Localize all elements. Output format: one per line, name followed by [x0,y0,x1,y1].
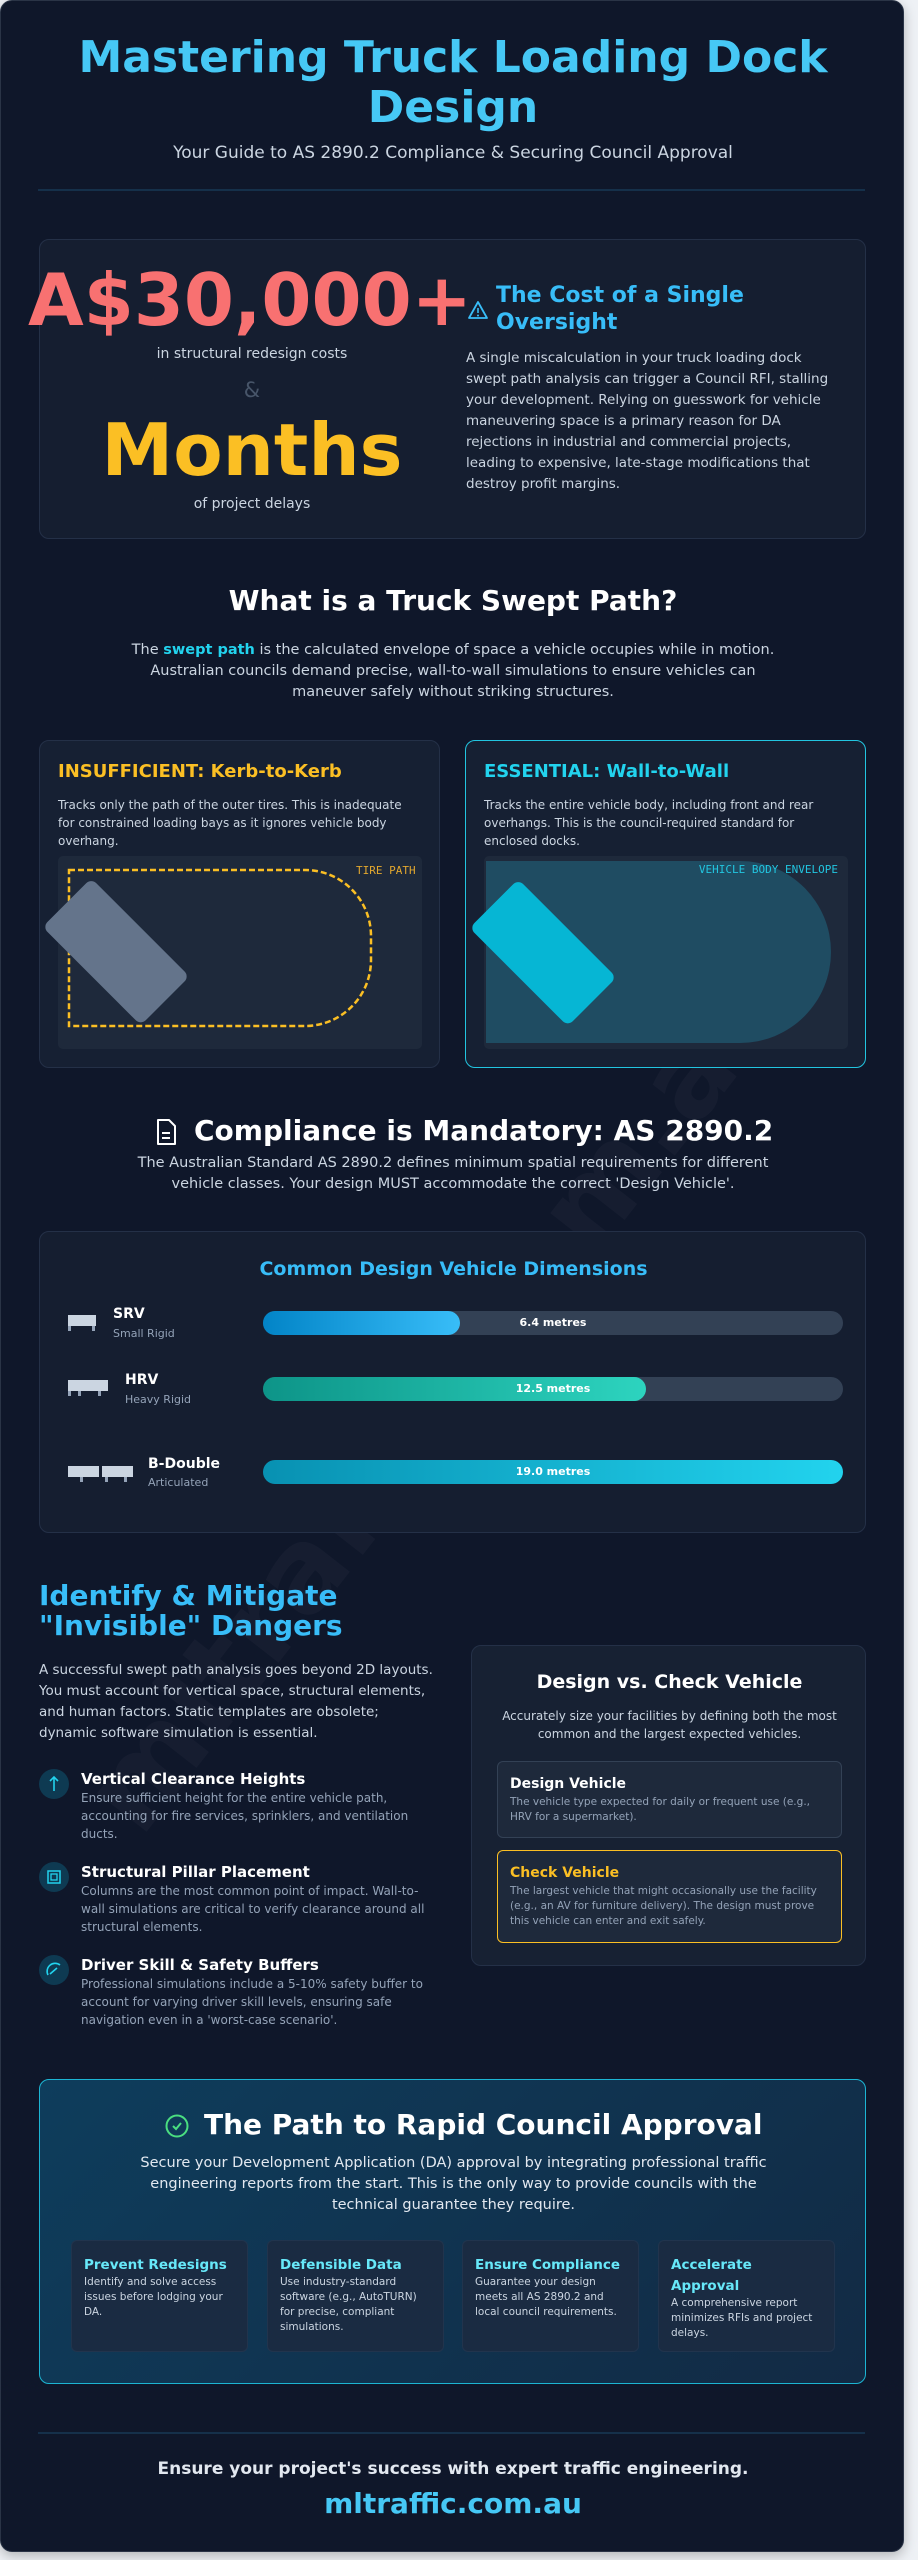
row: B-Double: Articulated [148,1476,208,1489]
title: Design [368,82,538,133]
box: check vehicle: The largest vehicle that might occasionally use the facility (e.g., an AV for furniture delivery). The design must prove this vehicle can enter and exit safely. [510,1885,817,1927]
panel: essential wall-to-wall [465,740,866,1068]
card: prevent redesigns: Prevent Redesigns [84,2257,227,2273]
heading: The Path to Rapid Council Approval [204,2108,762,2141]
row: HRV: Heavy Rigid [125,1393,191,1406]
item: pillar placement [39,1862,424,1934]
heading: compliance: Compliance is Mandatory: AS 2890.2 [194,1114,773,1147]
heading: identify dangers: Identify & Mitigate [39,1579,337,1612]
title [78,32,828,133]
description: Tracks only the path of the outer tires. This is inadequate for constrained loading bays as it ignores vehicle body overhang. [58,798,402,848]
chart title: Common Design Vehicle Dimensions [259,1258,648,1280]
row: HRV: 12.5 metres [516,1382,590,1395]
icon: gauge [39,1955,69,1985]
stat: months: Months [102,408,402,492]
subtitle: Your Guide to AS 2890.2 Compliance & Securing Council Approval [173,143,733,163]
diagram: body envelope: VEHICLE BODY ENVELOPE [699,863,838,876]
ampersand: & [244,378,260,402]
description: Accurately size your facilities by defining both the most common and the largest expected vehicles. [502,1709,837,1741]
item: pillar placement: Columns are the most common point of impact. Wall-to-wall simulations are critical to verify clearance around all structural elements. [81,1884,424,1934]
item: driver skill: Driver Skill & Safety Buffers [81,1956,319,1974]
row: B-Double [68,1456,843,1489]
card: accelerate approval: A comprehensive report minimizes RFIs and project delays. [671,2297,812,2339]
title: Mastering Truck Loading Dock [78,32,828,83]
stat label: cost: in structural redesign costs [157,346,347,362]
box: design vehicle: Design Vehicle [510,1776,626,1792]
card: defensible data: Use industry-standard software (e.g., AutoTURN) for precise, compliant simulations. [280,2276,417,2333]
icon: small truck [68,1315,96,1331]
row: SRV: Small Rigid [113,1327,175,1340]
diagram: body envelope [484,856,848,1049]
heading: identify dangers: "Invisible" Dangers [39,1609,343,1642]
card: prevent redesigns: Identify and solve access issues before lodging your DA. [84,2276,223,2318]
row: SRV: SRV [113,1306,145,1322]
icon: up arrow [39,1769,69,1799]
card: defensible data [267,2240,444,2352]
card: accelerate approval [658,2240,835,2352]
icon: check circle [166,2114,188,2138]
box: check vehicle: Check Vehicle [510,1865,619,1881]
footer tagline: Ensure your project's success with expert traffic engineering. [158,2459,748,2479]
heading: cost of single oversight: The Cost of a Single [496,283,744,308]
icon: articulated truck [68,1466,133,1482]
card: accelerate approval: Accelerate Approval [671,2257,752,2294]
heading: ESSENTIAL: Wall-to-Wall [484,761,729,782]
heading: cost of single oversight [496,283,744,335]
row: SRV [68,1306,843,1340]
card: ensure compliance: Ensure Compliance [475,2257,620,2273]
panel: path to rapid council approval [39,2079,866,2384]
item: driver skill: Professional simulations include a 5-10% safety buffer to account for varying driver skill levels, ensuring safe navigation even in a 'worst-case scenario'. [81,1977,423,2027]
panel: bar chart vehicle dimensions [39,1231,866,1533]
paragraph: A single miscalculation in your truck loading dock swept path analysis can trigger a Council RFI, stalling your development. Relying on guesswork for vehicle maneuvering space is a primary reason for DA rejections in industrial and commercial projects, leading to expensive, late-stage modifications that destroy profit margins. [466,350,828,492]
box: design vehicle: The vehicle type expected for daily or frequent use (e.g., HRV for a supermarket). [510,1796,810,1823]
item: vertical clearance: Ensure sufficient height for the entire vehicle path, accounting for fire services, sprinklers, and ventilation ducts. [81,1791,408,1841]
item: vertical clearance: Vertical Clearance Heights [81,1770,305,1788]
stat: cost: A$30,000+ [28,258,472,342]
icon: warning [468,301,488,319]
watermark: mltraffic.com.au [57,940,815,1856]
card: defensible data: Defensible Data [280,2257,402,2273]
row: B-Double: 19.0 metres [516,1465,590,1478]
panel: insufficient kerb-to-kerb [39,740,440,1068]
row: SRV: 6.4 metres [520,1316,586,1329]
row: HRV: HRV [125,1372,158,1388]
paragraph: Secure your Development Application (DA) approval by integrating professional traffic engineering reports from the start. This is the only way to provide councils with the technical guarantee they require. [140,2155,767,2213]
paragraph: compliance: The Australian Standard AS 2890.2 defines minimum spatial requirements for different vehicle classes. Your design MUST accommodate the correct 'Design Vehicle'. [138,1155,768,1192]
box: check vehicle [497,1850,842,1943]
item: pillar placement: Structural Pillar Placement [81,1863,310,1881]
item: vertical clearance [39,1769,408,1841]
box: design vehicle [497,1761,842,1838]
panel: design vs check vehicle [471,1645,866,1966]
paragraph: swept path: The swept path is the calculated envelope of space a vehicle occupies while in motion. Australian councils demand precise, wall-to-wall simulations to ensure vehicles can maneuver safely without striking structures. [132,642,774,700]
heading: Design vs. Check Vehicle [537,1671,802,1693]
row: HRV [68,1372,843,1406]
heading: cost of single oversight: Oversight [496,310,617,335]
panel: cost of oversight [39,239,866,539]
description: Tracks the entire vehicle body, including front and rear overhangs. This is the council-required standard for enclosed docks. [484,798,813,848]
heading: identify dangers [39,1579,343,1642]
card: ensure compliance: Guarantee your design meets all AS 2890.2 and local council requirements. [475,2276,617,2318]
row: B-Double: B-Double [148,1456,220,1472]
footer website: mltraffic.com.au [324,2487,582,2520]
stat label: delays: of project delays [194,496,310,512]
item: driver skill [39,1955,423,2027]
heading: what is swept path: What is a Truck Swept Path? [229,584,677,617]
diagram: tire path [58,856,422,1049]
card: ensure compliance [462,2240,639,2352]
card: prevent redesigns [71,2240,248,2352]
heading: INSUFFICIENT: Kerb-to-Kerb [58,761,342,782]
diagram: tire path: TIRE PATH [356,864,416,877]
paragraph: dangers intro: A successful swept path analysis goes beyond 2D layouts. You must account for vertical space, structural elements, and human factors. Static templates are obsolete; dynamic software simulation is essential. [39,1662,433,1741]
icon: heavy truck [68,1380,108,1396]
icon: document [157,1119,176,1145]
icon: pillar [39,1862,69,1892]
